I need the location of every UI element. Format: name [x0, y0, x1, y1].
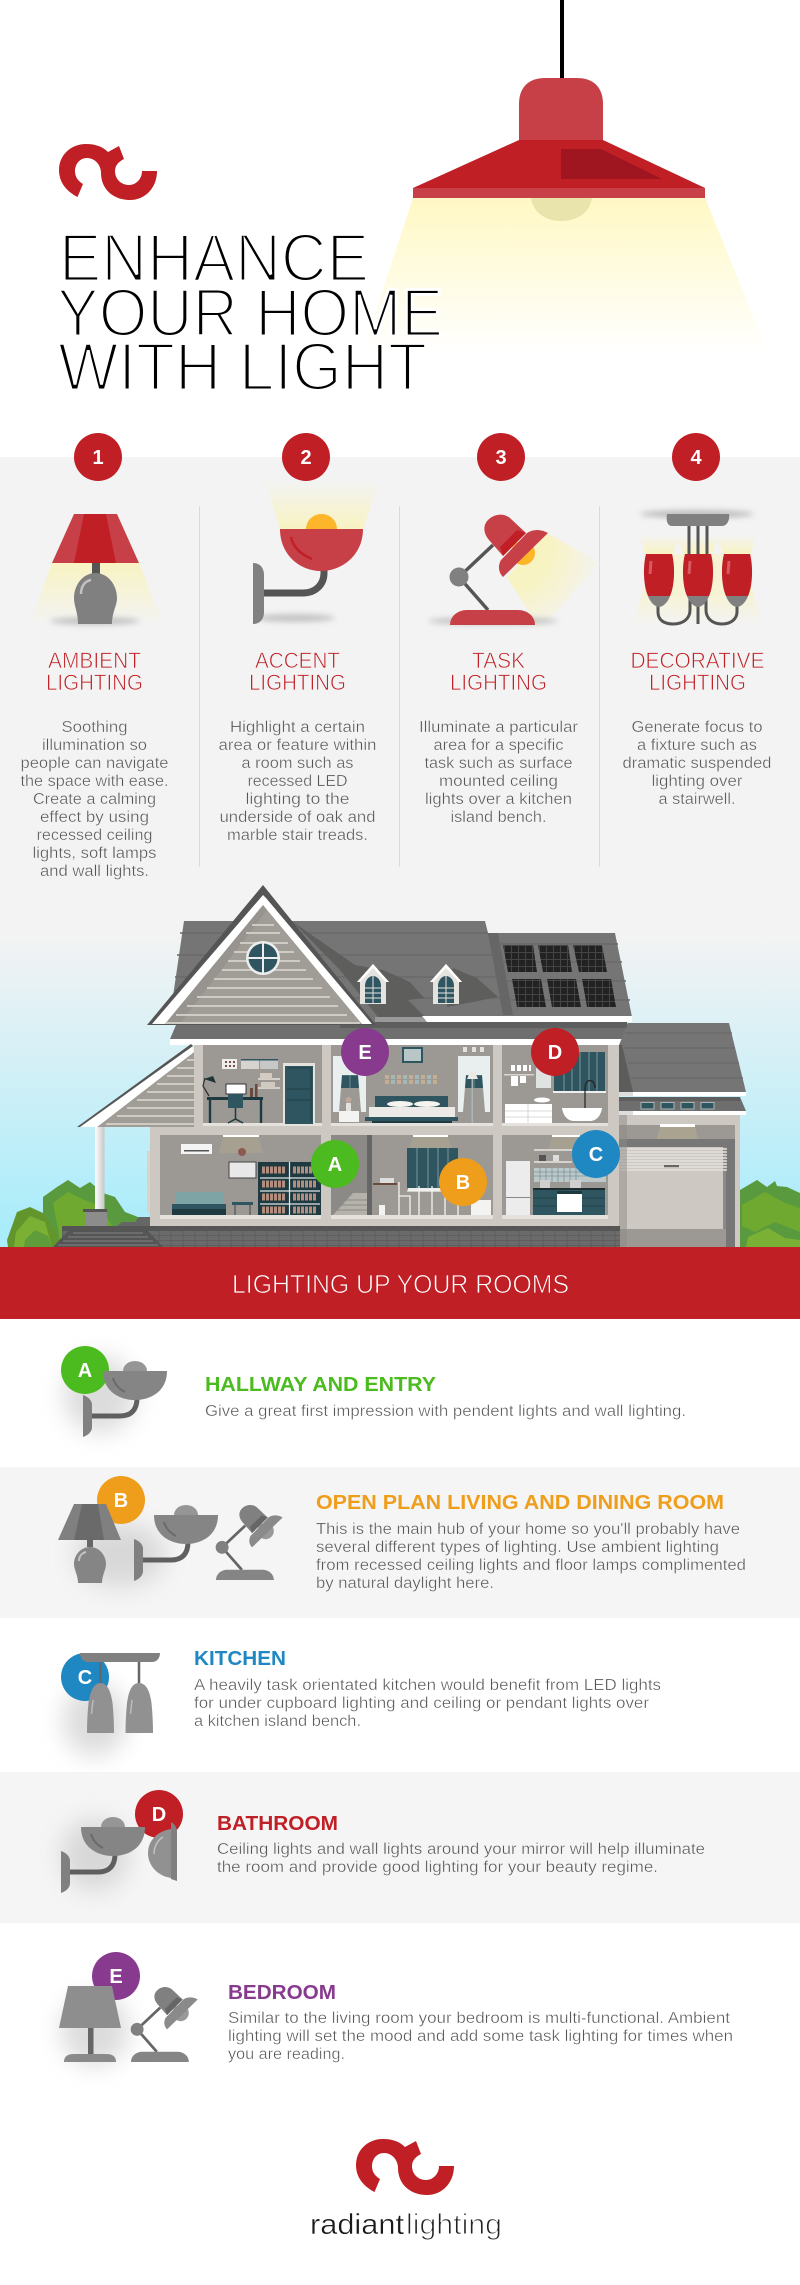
panel: bedroom: [59, 1952, 733, 2066]
text: accent description: recessed LED: [248, 773, 348, 790]
banner: lighting up your rooms: LIGHTING UP YOUR ROOMS: [232, 1269, 569, 1299]
text: decorative description: dramatic suspended: [622, 755, 772, 772]
heading: accent lighting: [249, 648, 346, 695]
lamp bulb: [531, 198, 592, 221]
text: ambient description: Soothing: [62, 719, 128, 736]
text block: a kitchen island bench.: [194, 1713, 361, 1730]
icon: kitchen pendants: [61, 1653, 160, 1756]
text: accent description: underside of oak and: [220, 809, 376, 826]
heading: decorative lighting: [630, 648, 764, 695]
heading: HALLWAY AND ENTRY: [205, 1373, 436, 1396]
text block: Give a great first impression with pendent lights and wall lighting.: [205, 1403, 686, 1420]
number badge 3: [477, 433, 525, 481]
text: ambient description: Create a calming: [33, 791, 156, 808]
text block: by natural daylight here.: [316, 1575, 494, 1592]
house walls: [147, 1045, 619, 1227]
left porch roof: [77, 1044, 194, 1127]
icon: accent wall light: [253, 482, 379, 624]
room marker D: D: [548, 1042, 562, 1064]
text block: for under cupboard lighting and ceiling or pendant lights over: [194, 1695, 649, 1712]
text: accent description: Highlight a certain: [230, 719, 365, 736]
banner: lighting up your rooms: [0, 1247, 800, 1319]
radiant logo top: [59, 144, 157, 200]
room: dining: [331, 1135, 493, 1219]
lamp shade shadow: [561, 149, 662, 179]
room marker C: [572, 1130, 620, 1178]
text: decorative description: a fixture such as: [637, 737, 757, 754]
title: YOUR HOME: [57, 275, 443, 351]
sky background: [0, 935, 800, 1250]
text: task description: island bench.: [450, 809, 546, 826]
text: task description: [419, 719, 578, 826]
dormer window right: [430, 964, 462, 1004]
text block: you are reading.: [228, 2046, 345, 2063]
text block: Similar to the living room your bedroom is multi-functional. Ambient: [228, 2010, 731, 2027]
text: ambient description: effect by using: [40, 809, 149, 826]
room marker E: E: [358, 1042, 372, 1064]
icon: hallway light: [61, 1346, 167, 1437]
room: bathroom: [502, 1045, 608, 1126]
room marker A: [311, 1140, 359, 1188]
text block: [228, 2010, 733, 2063]
heading: task lighting: TASK: [472, 648, 525, 673]
text: task description: lights over a kitchen: [425, 791, 572, 808]
text block: several different types of lighting. Use ambient lighting: [316, 1539, 719, 1556]
garage: [618, 1023, 746, 1247]
title: WITH LIGHT: [58, 329, 427, 405]
house illustration: [53, 885, 746, 1247]
text: ambient description: recessed ceiling: [36, 827, 152, 844]
icon: living room lights: [58, 1476, 283, 1587]
heading: BEDROOM: [228, 1981, 336, 2004]
heading: KITCHEN: [194, 1647, 286, 1670]
footer logo: [310, 2139, 502, 2241]
main roof: [171, 921, 632, 1022]
panel: open plan living and dining room: [0, 1467, 800, 1618]
text block: [316, 1521, 746, 1592]
heading: ambient lighting: [46, 648, 143, 695]
number badge 3: 3: [495, 447, 507, 469]
text: ambient description: and wall lights.: [40, 863, 149, 880]
heading: OPEN PLAN LIVING AND DINING ROOM: [316, 1491, 724, 1514]
icon: bedroom lights: [59, 1952, 198, 2066]
text: ambient description: illumination so: [42, 737, 147, 754]
title: [57, 220, 443, 405]
foundation and steps: [53, 1217, 620, 1247]
bushes right: [740, 1180, 800, 1247]
icon: bathroom lights: [61, 1790, 183, 1893]
heading: ambient lighting: AMBIENT: [48, 648, 141, 673]
lamp cord: [560, 0, 564, 80]
number badge 2: 2: [300, 447, 312, 469]
porch column: [83, 1127, 107, 1227]
room marker A: A: [328, 1154, 342, 1176]
icon: hallway light: A: [78, 1360, 92, 1382]
text: ambient description: the space with ease.: [20, 773, 168, 790]
text: decorative description: a stairwell.: [658, 791, 736, 808]
text block: lighting will set the mood and add some task lighting for times when: [228, 2028, 733, 2045]
icon: living room lights: B: [114, 1490, 128, 1512]
text: task description: Illuminate a particular: [419, 719, 578, 736]
text: ambient description: lights, soft lamps: [32, 845, 157, 862]
text block: Ceiling lights and wall lights around your mirror will help illuminate: [217, 1841, 705, 1858]
icon: bedroom lights: E: [109, 1966, 123, 1988]
text: accent description: lighting to the: [246, 791, 350, 808]
solar panels: [503, 945, 616, 1007]
text: task description: task such as surface: [424, 755, 572, 772]
heading: accent lighting: ACCENT: [255, 648, 340, 673]
eave band: [170, 1017, 631, 1045]
text block: [217, 1841, 705, 1876]
room marker C: C: [589, 1144, 603, 1166]
icon: kitchen pendants: C: [78, 1667, 92, 1689]
wordmark: radiant: [310, 2209, 404, 2241]
room marker B: [439, 1158, 487, 1206]
number badge 1: [74, 433, 122, 481]
text: accent description: a room such as: [242, 755, 354, 772]
icon: task desk lamp: [428, 515, 600, 630]
panel: bathroom: [0, 1772, 800, 1923]
room marker E: [341, 1028, 389, 1076]
logo mark: [356, 2139, 454, 2195]
icon: bathroom lights: D: [152, 1804, 166, 1826]
lamp light beam: [362, 198, 768, 353]
text block: [194, 1677, 661, 1730]
text: decorative description: [622, 719, 772, 808]
room marker D: [531, 1028, 579, 1076]
title: ENHANCE: [59, 220, 369, 296]
room: bedroom: [331, 1045, 493, 1126]
room: kitchen: [502, 1135, 608, 1219]
heading: ambient lighting: LIGHTING: [46, 670, 143, 695]
lamp shade: [413, 140, 705, 188]
number badge 4: 4: [690, 447, 702, 469]
icon: ambient table lamp: [30, 514, 163, 625]
number badge 1: 1: [92, 447, 104, 469]
wordmark light: lighting: [406, 2209, 502, 2241]
icon: decorative chandelier: [632, 510, 762, 625]
text: task description: mounted ceiling: [439, 773, 558, 790]
room: office: [203, 1045, 322, 1126]
text: ambient description: people can navigate: [20, 755, 168, 772]
room: living: [160, 1135, 321, 1219]
number badge 4: [672, 433, 720, 481]
upper roof trim: [422, 1016, 632, 1022]
text block: A heavily task orientated kitchen would benefit from LED lights: [194, 1677, 661, 1694]
text: decorative description: lighting over: [652, 773, 742, 790]
number badge 2: [282, 433, 330, 481]
text: accent description: area or feature within: [218, 737, 376, 754]
lamp rim: [413, 188, 705, 198]
heading: decorative lighting: DECORATIVE: [630, 648, 764, 673]
gable: [147, 885, 376, 1025]
room marker B: B: [456, 1172, 470, 1194]
text: accent description: [218, 719, 376, 844]
lamp cap: [519, 78, 603, 140]
heading: decorative lighting: LIGHTING: [649, 670, 746, 695]
panel: hallway and entry: [61, 1346, 686, 1437]
hero pendant lamp: [362, 0, 768, 353]
text: accent description: marble stair treads.: [227, 827, 368, 844]
heading: accent lighting: LIGHTING: [249, 670, 346, 695]
text block: This is the main hub of your home so you'll probably have: [316, 1521, 740, 1538]
text: ambient description: [20, 719, 168, 880]
panel: kitchen: [61, 1647, 661, 1756]
panel: lighting types background: [0, 457, 800, 935]
dormer window left: [357, 964, 389, 1004]
text: task description: area for a specific: [434, 737, 564, 754]
heading: BATHROOM: [217, 1812, 338, 1835]
heading: task lighting: LIGHTING: [450, 670, 547, 695]
text: decorative description: Generate focus to: [632, 719, 762, 736]
heading: task lighting: [450, 648, 547, 695]
bushes left: [7, 1180, 150, 1247]
text block: the room and provide good lighting for your beauty regime.: [217, 1859, 658, 1876]
text block: from recessed ceiling lights and floor lamps complimented: [316, 1557, 746, 1574]
